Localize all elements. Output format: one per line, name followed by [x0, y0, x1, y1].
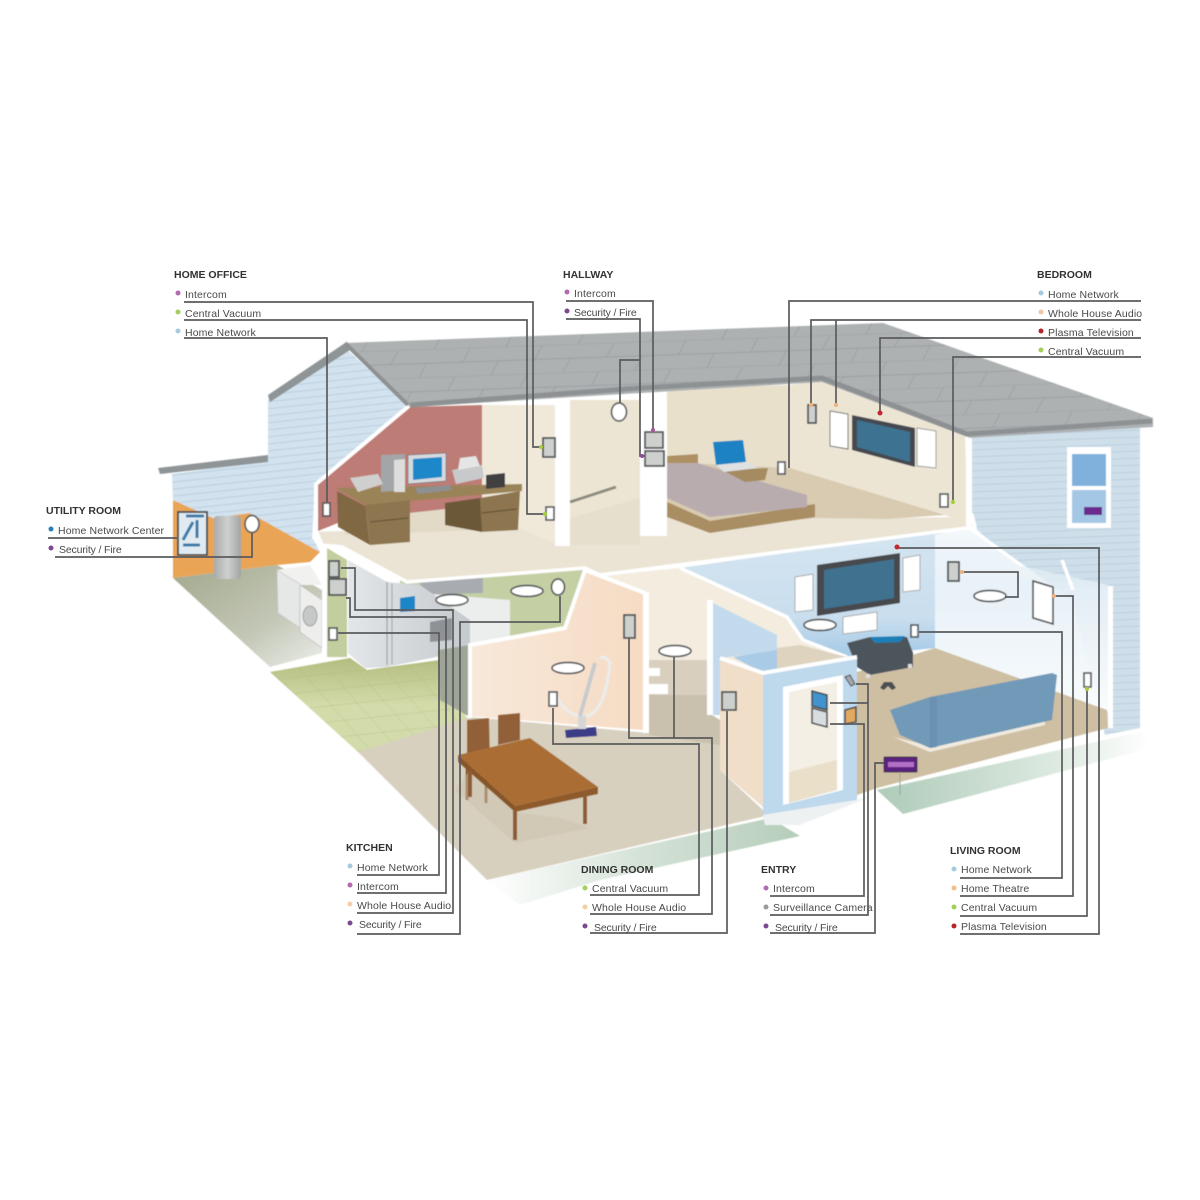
stairs	[649, 668, 668, 694]
hallway	[570, 400, 667, 545]
home office	[268, 343, 570, 546]
dining floor	[358, 717, 770, 880]
sofa	[890, 673, 1057, 752]
entry	[720, 645, 917, 825]
game controller	[880, 682, 896, 690]
legend: bedroom	[1037, 269, 1142, 358]
legend: home office: Intercom	[185, 289, 227, 301]
central hall	[600, 568, 847, 745]
kitchen tile floor	[270, 658, 470, 752]
legend: entry	[761, 864, 873, 934]
connector lines	[48, 301, 1141, 934]
front lawn	[487, 730, 1150, 905]
legend: dining room	[581, 864, 686, 934]
endpoint dots	[539, 403, 1089, 691]
utility panel	[178, 512, 207, 555]
legend: utility room	[46, 505, 165, 556]
bedroom	[667, 380, 972, 536]
keypad screens	[812, 691, 856, 727]
legend: living room: Home Theatre	[961, 883, 1029, 895]
legend: dining room: DINING ROOM	[581, 864, 654, 876]
legend: bedroom: Whole House Audio	[1048, 308, 1142, 320]
ceiling lights and sensors	[245, 403, 1006, 674]
legends	[46, 269, 1142, 934]
legend: utility room: Home Network Center	[58, 525, 165, 537]
legend: home office: Central Vacuum	[185, 308, 261, 320]
legend: bedroom: BEDROOM	[1037, 269, 1092, 281]
legend: kitchen: KITCHEN	[346, 842, 393, 854]
legend: living room: Central Vacuum	[961, 902, 1037, 914]
legend: kitchen	[346, 842, 451, 931]
dining table	[455, 738, 598, 843]
legend: kitchen: Security / Fire	[359, 919, 422, 931]
living room TV and speakers	[795, 553, 920, 634]
roof	[345, 323, 1153, 438]
legend: kitchen: Home Network	[357, 862, 429, 874]
legend: bedroom: Home Network	[1048, 289, 1120, 301]
outdoor sign	[884, 757, 917, 795]
desk	[336, 484, 522, 545]
dining chairs	[467, 713, 520, 803]
house illustration	[158, 323, 1153, 905]
legend: utility room: UTILITY ROOM	[46, 505, 121, 517]
bedroom speakers and TV	[830, 411, 936, 468]
nightstand and laptop	[713, 440, 768, 482]
legend: dining room: Central Vacuum	[592, 883, 668, 895]
legend: hallway: Security / Fire	[574, 307, 637, 319]
stove	[430, 618, 452, 642]
living room	[680, 527, 1113, 795]
wall panels	[323, 405, 1091, 710]
legend: home office: HOME OFFICE	[174, 269, 247, 281]
utility room	[158, 455, 322, 667]
computer	[381, 453, 452, 494]
upper floor slab	[316, 515, 975, 582]
legend: dining room: Whole House Audio	[592, 902, 686, 914]
legend: kitchen: Whole House Audio	[357, 900, 451, 912]
legend: living room: Plasma Television	[961, 921, 1047, 933]
legend: hallway: HALLWAY	[563, 269, 613, 281]
printer and phone	[350, 456, 505, 492]
kitchen	[322, 545, 585, 717]
legend: living room	[950, 845, 1047, 933]
legend: bedroom: Central Vacuum	[1048, 346, 1124, 358]
dining wall	[455, 570, 649, 843]
water heater	[214, 516, 241, 579]
legend: entry: ENTRY	[761, 864, 796, 876]
legend: utility room: Security / Fire	[59, 544, 122, 556]
legend: home office	[174, 269, 261, 339]
legend: dining room: Security / Fire	[594, 922, 657, 934]
legend: entry: Intercom	[773, 883, 815, 895]
legend: entry: Security / Fire	[775, 922, 838, 934]
legend: living room: LIVING ROOM	[950, 845, 1021, 857]
washer and dryer	[277, 565, 322, 648]
legend: kitchen: Intercom	[357, 881, 399, 893]
vacuum	[557, 657, 610, 738]
small screen	[400, 596, 415, 612]
legend: bedroom: Plasma Television	[1048, 327, 1134, 339]
window	[1067, 447, 1111, 528]
exterior right wall	[972, 424, 1140, 735]
bed	[667, 454, 815, 533]
entry door	[783, 675, 843, 805]
legend: home office: Home Network	[185, 327, 257, 339]
legend: entry: Surveillance Camera	[773, 902, 873, 914]
media console	[847, 636, 913, 678]
surveillance camera	[845, 675, 855, 686]
legend: hallway	[563, 269, 637, 319]
legend: living room: Home Network	[961, 864, 1033, 876]
legend: hallway: Intercom	[574, 288, 616, 300]
